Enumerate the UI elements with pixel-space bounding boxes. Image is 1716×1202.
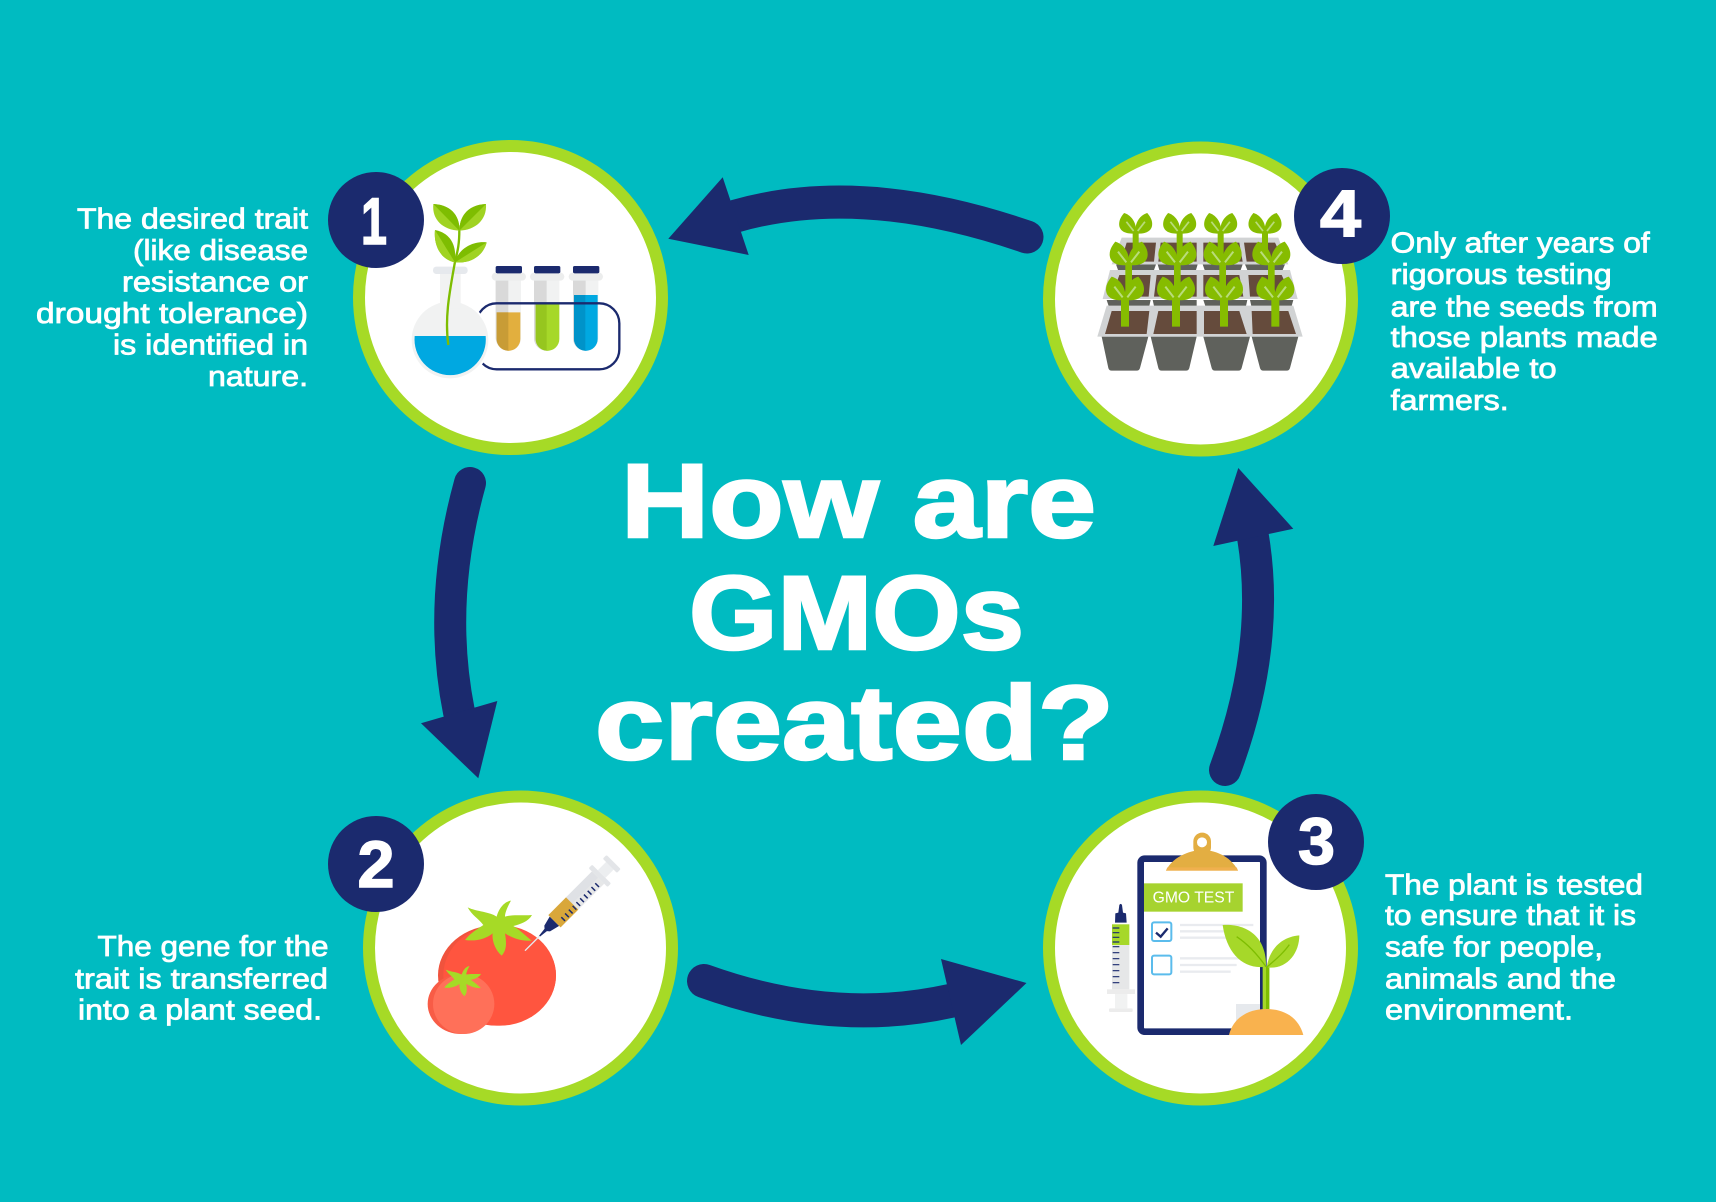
step 3 circle: [1049, 796, 1352, 1100]
panel: step 3: [1049, 794, 1364, 1100]
text: step 4 description: those plants made: [1391, 322, 1658, 354]
text: step 2 description: The gene for the: [98, 931, 328, 963]
step 4 circle: [1049, 148, 1352, 450]
text: step 1 description: [36, 204, 308, 393]
badge: number 4: [1294, 168, 1390, 264]
text: step 1 description: is identified in: [113, 330, 308, 362]
badge: number 3: [1268, 794, 1364, 890]
title: How are: [621, 443, 1096, 560]
arrow: step 1 to step 2: [421, 483, 497, 778]
panel: step 4: [1049, 148, 1390, 450]
badge: number 2: [328, 816, 424, 912]
title: GMOs: [689, 555, 1024, 672]
icon: flask and test tubes: [410, 204, 619, 380]
badge: number 4: 4: [1320, 176, 1361, 250]
badge: number 2: 2: [358, 827, 394, 901]
text: step 4 description: rigorous testing: [1391, 259, 1612, 291]
badge: number 1: [328, 172, 424, 268]
text: step 2 description: trait is transferred: [75, 963, 328, 995]
text: step 4 description: farmers.: [1391, 385, 1509, 417]
step 1 circle: [359, 146, 662, 449]
arrow: step 3 to step 4: [1213, 468, 1293, 770]
text: step 1 description: The desired trait: [77, 204, 308, 236]
panel: step 1: [328, 146, 662, 449]
arrow: step 2 to step 3: [704, 959, 1026, 1045]
text: step 2 description: [75, 931, 328, 1026]
text: step 4 description: available to: [1391, 353, 1557, 385]
badge: number 1: 1: [361, 184, 387, 258]
icon: tomatoes and syringe: [428, 853, 623, 1034]
text: step 3 description: environment.: [1385, 994, 1573, 1026]
icon: GMO test clipboard: GMO TEST: [1153, 889, 1235, 906]
text: step 3 description: safe for people,: [1385, 932, 1603, 964]
icon: seedling trays: [1097, 213, 1303, 371]
badge: number 3: 3: [1298, 804, 1335, 878]
text: step 4 description: are the seeds from: [1391, 291, 1658, 323]
title: created?: [595, 665, 1114, 782]
arrow: step 4 to step 1: [668, 177, 1027, 255]
icon: GMO test clipboard: [1107, 833, 1303, 1035]
text: step 3 description: The plant is tested: [1385, 869, 1643, 901]
text: step 1 description: nature.: [208, 361, 308, 393]
text: step 4 description: [1391, 227, 1658, 417]
text: step 1 description: (like disease: [133, 235, 308, 267]
text: step 3 description: to ensure that it is: [1385, 900, 1636, 932]
text: step 2 description: into a plant seed.: [78, 994, 322, 1026]
title: [595, 443, 1114, 782]
panel: step 2: [328, 796, 672, 1100]
text: step 1 description: drought tolerance): [36, 298, 308, 330]
text: step 1 description: resistance or: [122, 266, 308, 298]
step 2 circle: [369, 796, 672, 1100]
text: step 3 description: [1385, 869, 1643, 1026]
text: step 3 description: animals and the: [1385, 963, 1616, 995]
text: step 4 description: Only after years of: [1391, 227, 1651, 259]
